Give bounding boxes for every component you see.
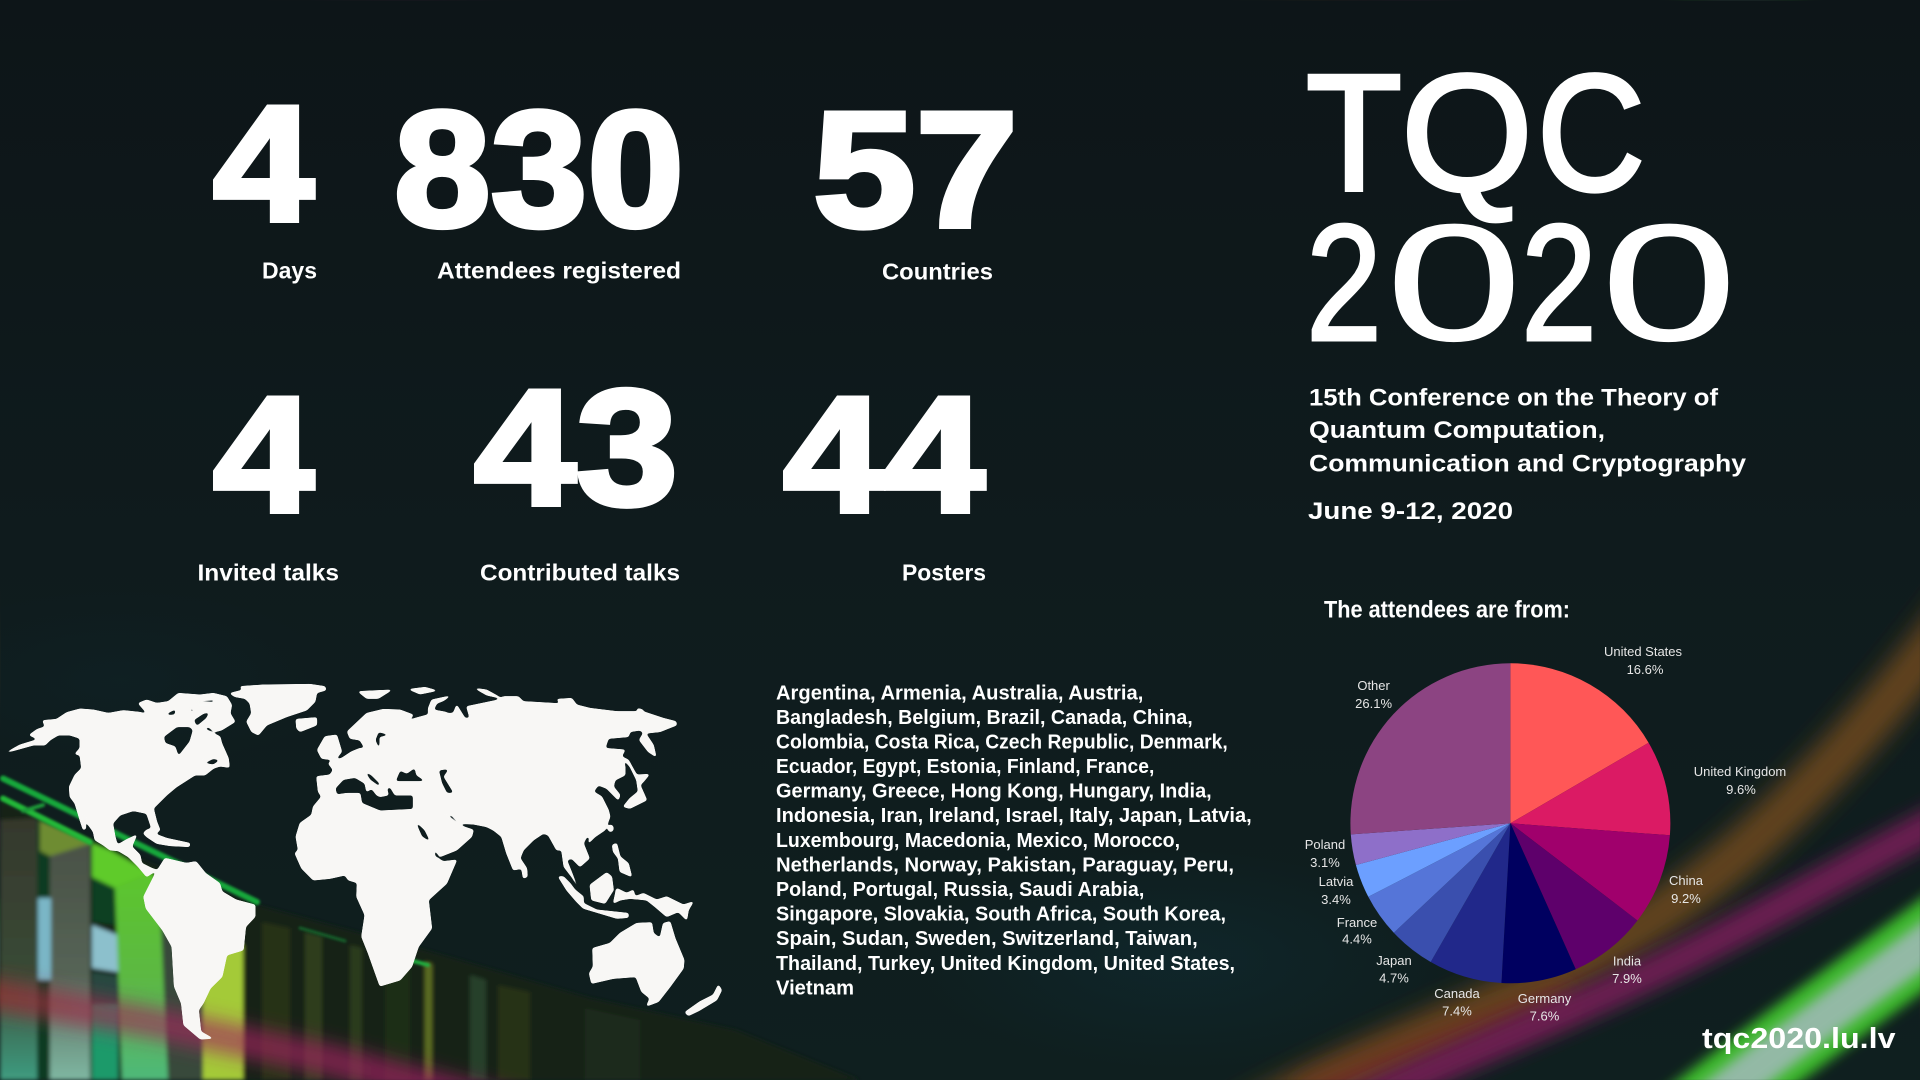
title: TQC 2020: Q — [1401, 41, 1533, 226]
list of countries: Argentina, Armenia, Australia, Austria, — [776, 682, 1143, 704]
slice: Canada — [1431, 823, 1510, 983]
Arctic islands — [358, 687, 643, 713]
pie labels: United States — [1604, 644, 1683, 659]
statistic: 4 days: 4 — [213, 72, 314, 256]
pie labels: Latvia — [1319, 874, 1354, 889]
statistic: 57 countries: 57 — [813, 78, 1018, 262]
slice: United States — [1510, 663, 1649, 823]
Eurasia and Africa — [295, 697, 677, 986]
background: illuminated building — [0, 800, 860, 1080]
list of countries: Colombia, Costa Rica, Czech Republic, Denmark, — [776, 731, 1228, 753]
conference dates: June 9-12, 2020 — [1308, 498, 1513, 525]
slice: China — [1510, 823, 1670, 920]
slice: Germany — [1501, 823, 1576, 983]
slice: France — [1368, 823, 1510, 933]
slice: Japan — [1394, 823, 1510, 962]
pie labels: 9.2% — [1671, 891, 1701, 906]
list of countries — [776, 682, 1252, 999]
slice: Latvia — [1356, 823, 1510, 897]
slice: United Kingdom — [1510, 743, 1670, 835]
pie chart: attendees by country — [1350, 663, 1670, 983]
South America — [144, 858, 255, 1039]
list of countries: Netherlands, Norway, Pakistan, Paraguay, Peru, — [776, 854, 1234, 876]
pie labels: 7.4% — [1442, 1004, 1472, 1019]
pie labels: Germany — [1518, 991, 1572, 1006]
conference subtitle — [1309, 385, 1747, 478]
pie labels: 3.4% — [1321, 892, 1351, 907]
slice: India — [1510, 823, 1638, 969]
Iceland — [296, 718, 317, 732]
title: TQC 2020 — [1306, 41, 1737, 376]
list of countries: Bangladesh, Belgium, Brazil, Canada, China, — [776, 707, 1193, 729]
Australia and New Zealand — [589, 922, 722, 1016]
background: building green light rails — [3, 778, 428, 965]
pie labels: 7.9% — [1612, 971, 1642, 986]
pie labels: 9.6% — [1726, 782, 1756, 797]
list of countries: Thailand, Turkey, United Kingdom, United States, — [776, 953, 1235, 975]
pie labels: France — [1337, 915, 1377, 930]
list of countries: Poland, Portugal, Russia, Saudi Arabia, — [776, 879, 1144, 901]
statistic: 44 posters: 44 — [783, 362, 985, 546]
pie labels: 4.7% — [1379, 971, 1409, 986]
list of countries: Vietnam — [776, 977, 854, 999]
conference subtitle: Quantum Computation, — [1309, 417, 1605, 444]
pie labels: 3.1% — [1310, 855, 1340, 870]
statistic: 43 contributed talks: Contributed talks — [480, 560, 680, 586]
statistic: 43 contributed talks: 43 — [474, 356, 678, 540]
statistic: 57 countries: Countries — [882, 259, 993, 285]
pie labels: 4.4% — [1342, 932, 1372, 947]
title: TQC 2020: 0 — [1386, 191, 1522, 376]
list of countries: Indonesia, Iran, Ireland, Israel, Italy, Japan, Latvia, — [776, 805, 1252, 827]
title: TQC 2020: T — [1306, 41, 1402, 226]
pie labels: 26.1% — [1355, 696, 1392, 711]
slice: Poland — [1351, 823, 1510, 865]
statistic: 4 invited talks: Invited talks — [198, 560, 339, 586]
statistic: 4 invited talks — [198, 362, 339, 586]
pie chart heading: The attendees are from: — [1324, 597, 1570, 624]
Greenland — [230, 684, 326, 735]
Southeast Asia islands — [558, 825, 693, 920]
conference subtitle: 15th Conference on the Theory of — [1309, 385, 1719, 412]
pie labels: 7.6% — [1530, 1009, 1560, 1024]
website url: tqc2020.lu.lv — [1702, 1023, 1896, 1055]
North America — [6, 693, 235, 877]
title: TQC 2020: 2 — [1521, 191, 1597, 376]
pie labels: India — [1613, 954, 1642, 969]
list of countries: Ecuador, Egypt, Estonia, Finland, France, — [776, 756, 1154, 778]
pie labels: Japan — [1376, 953, 1412, 968]
pie labels: 16.6% — [1627, 662, 1664, 677]
conference subtitle: Communication and Cryptography — [1309, 451, 1747, 478]
list of countries: Singapore, Slovakia, South Africa, South Korea, — [776, 904, 1226, 926]
pie labels — [1305, 644, 1786, 1024]
slice: Other — [1350, 663, 1510, 834]
title: TQC 2020: 2 — [1306, 191, 1382, 376]
title: TQC 2020: 0 — [1601, 191, 1737, 376]
pie labels: Canada — [1434, 986, 1481, 1001]
list of countries: Germany, Greece, Hong Kong, Hungary, India, — [776, 781, 1212, 803]
Japan — [622, 757, 649, 808]
list of countries: Spain, Sudan, Sweden, Switzerland, Taiwan, — [776, 928, 1198, 950]
statistic: 4 days: Days — [262, 258, 317, 284]
British Isles — [317, 735, 342, 760]
pie labels: Other — [1357, 678, 1391, 693]
statistic: 44 posters: Posters — [902, 560, 986, 586]
statistic: 4 invited talks: 4 — [213, 362, 314, 546]
title: TQC 2020: C — [1537, 41, 1645, 226]
statistic: 830 attendees registered: 830 — [394, 77, 684, 261]
pie labels: Poland — [1305, 837, 1345, 852]
world map — [6, 684, 722, 1039]
pie labels: China — [1669, 873, 1704, 888]
list of countries: Luxembourg, Macedonia, Mexico, Morocco, — [776, 830, 1180, 852]
pie labels: United Kingdom — [1694, 764, 1786, 779]
statistic: 830 attendees registered: Attendees registered — [437, 258, 681, 284]
